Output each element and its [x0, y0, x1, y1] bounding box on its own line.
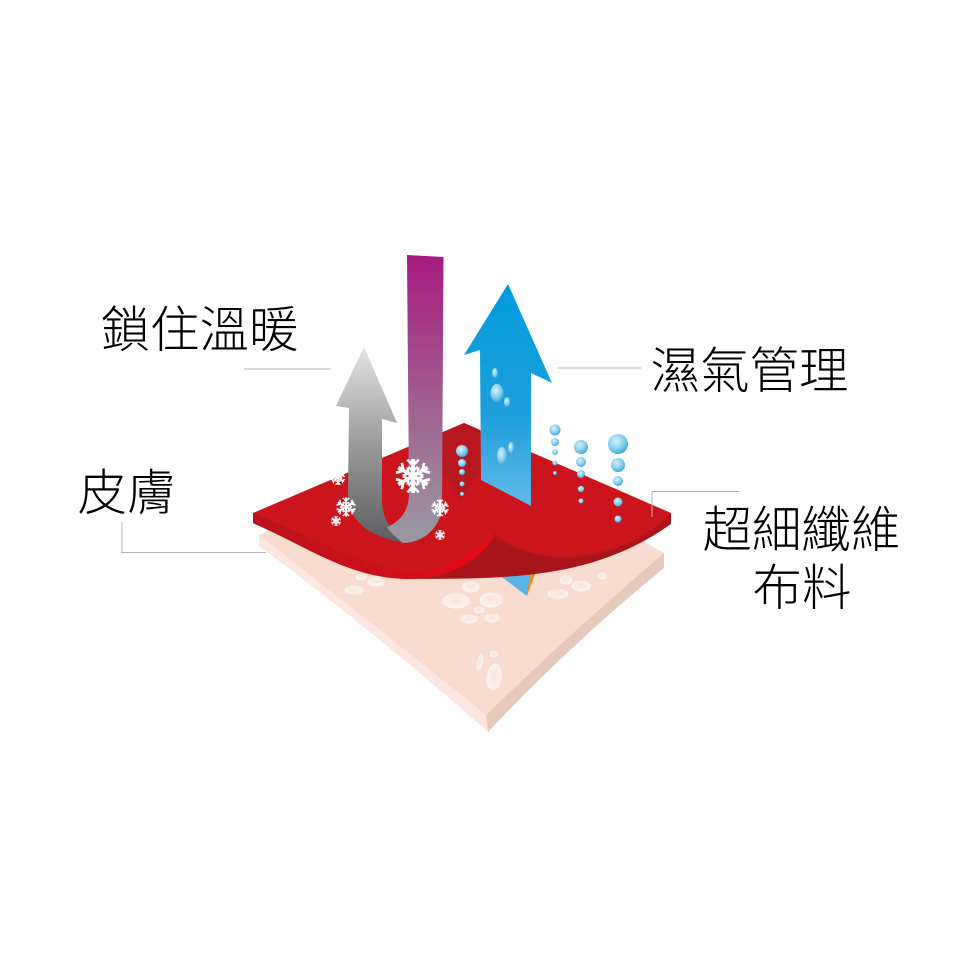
arrow: grey warmth arrow — [336, 347, 405, 543]
leader line: warmth — [244, 368, 331, 370]
blue arrow tip below fabric — [495, 572, 531, 596]
arrow: purple to grey U-turn band — [387, 255, 444, 543]
label: skin: 皮膚 — [78, 466, 176, 521]
arrow: blue moisture arrow — [464, 284, 552, 506]
leader line: skin — [122, 522, 266, 552]
leader line: moisture — [558, 367, 641, 369]
label: microfibre fabric: 超細纖維 — [702, 503, 900, 558]
panel: skin layer — [259, 440, 664, 732]
panel: red microfibre fabric — [253, 423, 671, 579]
orange fold below fabric — [527, 572, 536, 596]
icons: snowflakes — [331, 459, 449, 540]
water beads on skin — [344, 572, 607, 692]
label: fabric line two: 布料 — [752, 561, 852, 616]
icons: moisture droplets — [456, 368, 628, 522]
leader line: fabric — [652, 492, 739, 517]
label: lock in warmth: 鎖住溫暖 — [100, 303, 298, 358]
label: moisture management: 濕氣管理 — [650, 344, 848, 399]
